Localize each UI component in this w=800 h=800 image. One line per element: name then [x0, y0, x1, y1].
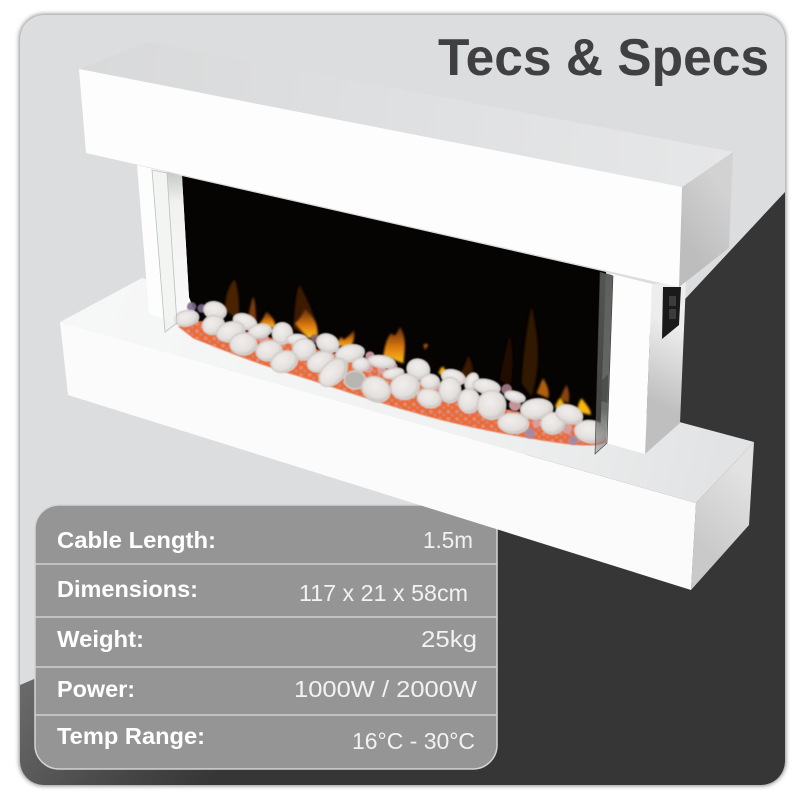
fireplace: [60, 42, 754, 590]
row: power: [57, 676, 477, 702]
row: temp range: 16°C - 30°C: [352, 728, 475, 754]
white pebbles: [174, 299, 608, 445]
right pillar: [606, 274, 686, 454]
row: cable length: [57, 527, 473, 553]
base shelf: [60, 278, 754, 590]
row: temp range: Temp Range:: [57, 723, 205, 749]
top mantel: [79, 42, 733, 287]
left glass panel: [152, 170, 177, 332]
right glass panel: [595, 272, 613, 454]
row: dimensions: Dimensions:: [57, 576, 198, 602]
title: Tecs & Specs: [438, 29, 769, 87]
control socket: [662, 287, 681, 339]
flames and stones (reference-zoom coordinates): [174, 280, 608, 445]
glowing ember bed: [178, 321, 607, 445]
spec table panel: [35, 505, 497, 769]
row: dimensions: 117 x 21 x 58cm: [299, 580, 468, 606]
row: power: Power:: [57, 676, 135, 702]
crystal texture: [178, 321, 607, 445]
row: temp range: [57, 723, 475, 754]
left pillar: [137, 165, 190, 325]
row: cable length: 1.5m: [423, 527, 473, 553]
firebox inner side: [167, 172, 189, 323]
row: weight: [57, 626, 477, 652]
firebox: [182, 176, 606, 440]
panel background: [35, 505, 497, 769]
row: power: 1000W / 2000W: [294, 676, 477, 702]
dark floor: [20, 192, 785, 785]
flames: [225, 280, 591, 415]
row: cable length: Cable Length:: [57, 527, 216, 553]
glass crystals: [187, 302, 578, 445]
row: weight: Weight:: [57, 626, 144, 652]
row: dimensions: [57, 576, 468, 606]
row: weight: 25kg: [421, 626, 477, 652]
